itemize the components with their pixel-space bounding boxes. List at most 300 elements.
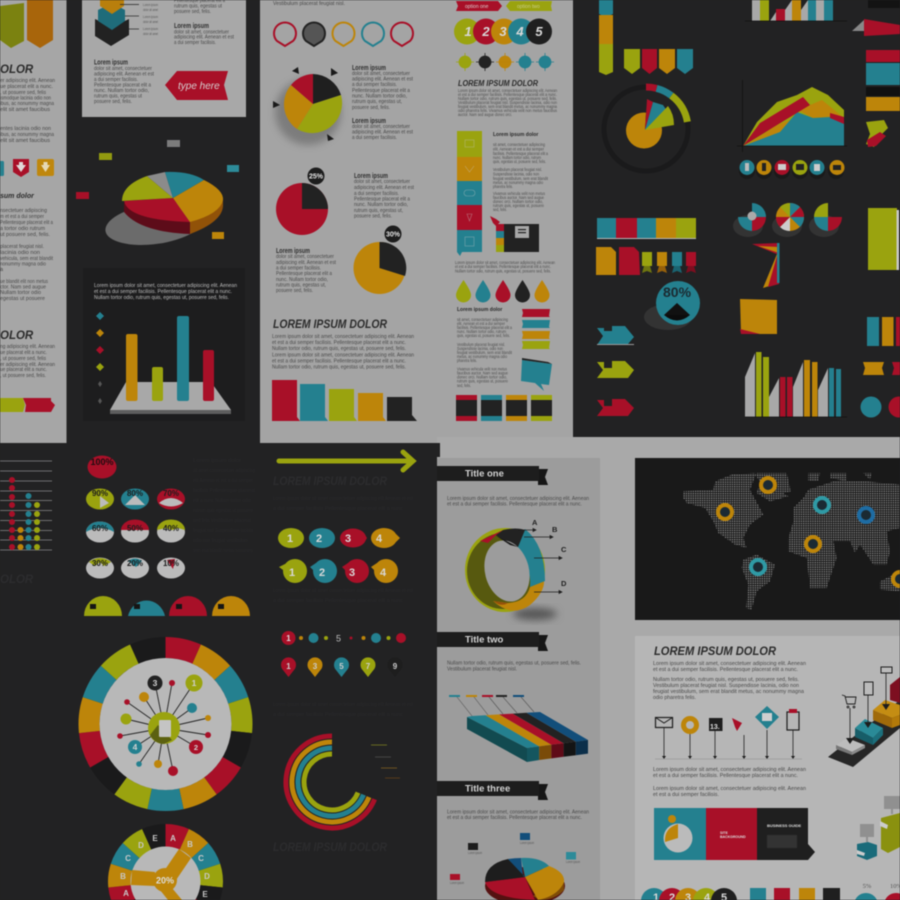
text block: lower notes: faucibus auctor. Nam sed augue: [457, 370, 508, 376]
text block: 30% note: Pellentesque placerat elit a: [276, 271, 333, 277]
chart: percent domes grid: 80%: [127, 489, 143, 498]
chart: 3D pie lower: Lorem ipsum: [468, 850, 482, 855]
text block: lower notes: feugiat vestibulum, sem erat blandit: [457, 350, 513, 355]
numbered circles: 1: [464, 24, 472, 39]
chart: lettered wheel: B: [120, 872, 126, 881]
text block: 30% note: nunc. Nullam tortor odio,: [276, 277, 328, 283]
3D column blocks: [0, 0, 53, 48]
bars: [126, 316, 214, 401]
vertical tab strip: [457, 131, 482, 256]
text block: chart note: Lorem ipsum dolor sit amet, consectetuer adipiscing elit. Aenean: [94, 283, 237, 289]
speech bubble: [521, 358, 552, 391]
faded text block: Lorem ipsum dolor sit amet consectetuer adipiscing elit Aenean et est: [273, 702, 414, 708]
text block: left intro: elit sit amet faucibus: [0, 107, 50, 113]
wheel hub and spokes: 3: [153, 678, 158, 688]
speech bubbles row one: 1: [287, 533, 293, 545]
bottom flags: [750, 888, 840, 900]
text block: card left: Pellentesque placerat elit a: [94, 82, 152, 88]
panel: upper right dark sheet: [580, 0, 900, 437]
crosshair dots: [456, 53, 554, 71]
legend diamonds: [96, 312, 104, 404]
text block: left intro: elit sit amet faucibus: [0, 138, 50, 144]
banner: title two: [437, 632, 548, 651]
panel: lower right paper: [635, 636, 900, 900]
text block: 25% note: dolor sit amet, consectetuer: [354, 179, 410, 185]
text block: left body: [0, 208, 54, 302]
faded text column: sit amet consectetuer adipiscing: [193, 468, 255, 474]
chart: 3D ring: [465, 518, 567, 620]
numbered pins row: [281, 657, 403, 677]
faded text column: elit a nunc Nullam tortor odio: [193, 498, 251, 504]
text block: lower right intro: et est a dui semper facilisis. Pellentesque placerat elit a nunc.: [653, 667, 798, 673]
banner: title three: Title three: [465, 784, 510, 794]
text block: left body: nsectetuer adipiscing: [0, 208, 47, 214]
text block: lower notes: donec orci. Nullam tortor odio,: [457, 374, 507, 380]
panel: titled sheet: [437, 458, 600, 900]
numbered dots row: 5: [336, 634, 341, 644]
ribbons: option one and two: [456, 1, 552, 11]
speech bubbles row one: 2: [316, 533, 322, 545]
subheading: lorem ipsum dolor right: LOREM IPSUM DOLOR: [458, 79, 538, 88]
icons: arrow tabs: [0, 159, 54, 177]
text block: card left: rutrum quis, egestas ut: [94, 94, 142, 100]
chart: descending tab bars: [272, 380, 417, 421]
wheel hub and spokes: [117, 674, 211, 776]
chart: lettered wheel: C: [125, 854, 131, 863]
text block: title two copy: Vestibulum placerat feugiat nisl.: [447, 666, 517, 672]
text block: lower right intro: odio pharetra felis.: [653, 695, 696, 701]
text block: tab strip notes: facilisis. Pellentesque placerat elit a: [493, 151, 548, 156]
text block: lower notes: elit. Aenean et est a dui semper: [457, 321, 505, 326]
text block: pie notes: rutrum quis, egestas ut,: [352, 99, 402, 105]
text block: card left: posuere sed, felis.: [94, 99, 132, 105]
faded text block: Lorem ipsum dolor sit amet consectetuer adipiscing elit Aenean et est: [273, 496, 414, 502]
text block: left footer: ue placerat elit a nunc.: [0, 367, 47, 373]
text block: left intro: [0, 78, 55, 144]
faded text block: Lorem ipsum dolor sit amet consectetuer adipiscing elit Aenean et est: [273, 588, 414, 594]
text block: title one copy: [447, 496, 589, 508]
pinned note card: [490, 216, 539, 252]
faded heading: lorem ipsum dolor lower: LOREM IPSUM DOLOR: [273, 842, 388, 854]
text block: left intro: , ut posuere sed, felis: [0, 90, 46, 96]
text block: card left: a dui semper facilisis.: [94, 77, 138, 83]
text block: chart note: [94, 283, 237, 301]
chart: percent domes grid: 30%: [92, 559, 108, 568]
text block: main copy: Nullam tortor odio, rutrum quis, egestas ut, posuere sed, felis.: [272, 364, 406, 370]
chart: 30% pie: [354, 226, 406, 294]
text block: title two copy: Nullam tortor odio, rutrum quis, egestas ut, posuere sed, felis.: [447, 660, 581, 666]
chart: percent domes grid: 20%: [127, 559, 143, 568]
numbered circles: 3: [499, 24, 507, 39]
text block: left footer: ue placerat elit a nunc.: [0, 350, 47, 356]
numbered pins row: 5: [339, 662, 344, 671]
text block: main copy: et est a dui semper facilisis. Pellentesque placerat elit a nunc.: [272, 358, 406, 364]
percent minis: [854, 883, 900, 900]
text block: main copy: Lorem ipsum dolor sit amet, consectetuer adipiscing elit. Aenean: [272, 334, 414, 340]
faded text column: sed felis Vestibulum placerat: [193, 518, 252, 524]
text block: left footer: er adipiscing elit. Aenean: [0, 362, 55, 368]
text block: card right: posuere sed, felis.: [174, 9, 211, 15]
text block: lower right intro: Nullam tortor odio, rutrum quis, egestas ut, posuere sed, felis.: [653, 677, 799, 683]
callout: 80 percent: [644, 281, 700, 330]
chart: 25% pie: 25%: [309, 174, 324, 180]
dark sheet top edge: [260, 443, 440, 457]
bottom numbered circles: [641, 888, 737, 900]
text block: right copy: auctor. Nam sed augue donec orci.: [458, 112, 512, 117]
speech bubbles row one: 4: [376, 533, 383, 545]
text block: 25% note: [354, 171, 414, 220]
text block: 25% note: posuere sed, felis.: [354, 214, 392, 220]
text block: title three copy: [447, 810, 589, 821]
banner: title two: Title two: [465, 634, 504, 646]
numbered pins row: 7: [366, 662, 371, 671]
icon: stacked cubes: dolor sit amet: [143, 19, 159, 24]
speech bubbles row one: 3: [345, 533, 351, 545]
fan of folded strips: [752, 243, 780, 288]
chart: radial pie: [604, 87, 688, 171]
chart: 30% pie: 30%: [386, 232, 401, 238]
text block: pie notes: Pellentesque placerat elit a: [352, 88, 411, 94]
panel: left paper column: [0, 0, 66, 443]
faded text column: feugiat nisl Suspendisse lacinia: [193, 528, 253, 534]
text block: left body: Pellentesque placerat elit a: [0, 220, 54, 226]
chart: 3D ring: D: [561, 579, 567, 588]
faded text column: facilisis Pellentesque placerat: [193, 488, 256, 494]
text block: left body: vehicula, sem erat blandit: [0, 256, 53, 262]
text block: title three copy: Lorem ipsum dolor sit amet, consectetuer adipiscing elit. Aenean: [447, 810, 589, 816]
text block: pie notes: nunc. Nullam tortor odio,: [352, 94, 407, 100]
text block: tab strip notes: Suspendisse lacinia, odio non: [493, 172, 539, 176]
text block: card left: Lorem ipsum: [94, 58, 128, 66]
folded info card: BACKGROUND: [720, 835, 746, 839]
numbered pins row: 3: [313, 662, 318, 671]
text block: pie notes: dolor sit amet, consectetuer: [352, 71, 410, 77]
chart: 100 percent dome: 100%: [90, 457, 114, 467]
faded text block: a dui semper facilisis Pellentesque placerat elit a nunc: [273, 712, 404, 718]
text block: card right: a dui semper facilisis.: [174, 40, 216, 46]
text block: left intro: entes lacinia odio non: [0, 126, 51, 132]
faded text block: a dui semper facilisis Pellentesque placerat elit a nunc: [273, 506, 404, 512]
chevron flags: [624, 49, 693, 74]
text block: lower notes: quis, egestas ut, posuere sed, felis.: [457, 333, 510, 338]
text block: lower notes: Vivamus vehicula velit non metus: [457, 366, 507, 372]
text: top stub: Vestibulum placerat feugiat nisl.: [273, 1, 345, 7]
text block: pie notes: posuere sed, felis.: [352, 105, 390, 111]
text block: lower notes: metus, ac nonummy magna odio: [457, 354, 507, 359]
text block: tab strip notes: [493, 132, 549, 212]
text block: pie notes: Lorem ipsum: [352, 63, 386, 72]
ribbon: type here: [165, 71, 228, 100]
folded info card: BUSINESS GUIDE: [767, 823, 802, 828]
faded text column: [193, 458, 256, 554]
text block: left footer: ng adipiscing elit. Aenean: [0, 344, 55, 350]
icons: pointer row: 13.: [710, 724, 720, 731]
faded heading: olor: OLOR: [0, 574, 34, 586]
tabbed icon squares: [456, 395, 552, 421]
subheading: sum dolor: sum dolor: [0, 193, 35, 200]
chart: 3D ring: C: [561, 545, 567, 554]
text block: right copy: feugiat vestibulum, sem erat blandit metus, ac nonummy magna: [458, 104, 557, 109]
text block: 25% note: adipiscing elit. Aenean et est: [354, 185, 414, 191]
text block: 25% note: Pellentesque placerat elit a: [354, 196, 411, 202]
text block: under card: [455, 260, 555, 274]
text block: lower notes: nunc. Nullam tortor odio, rutrum: [457, 329, 506, 334]
speech bubbles row two: 3: [349, 567, 355, 579]
text block: tab strip notes: donec orci. Nullam tortor odio,: [493, 199, 543, 204]
ribbons: option one and two: option one: [465, 4, 489, 10]
cube charts: [857, 796, 900, 860]
text block: lower notes: Vestibulum placerat feugiat nisl.: [457, 342, 505, 347]
sticky note: [740, 299, 777, 334]
faded text column: rutrum quis egestas ut posuere: [193, 508, 253, 514]
text block: left body: ut posuere sed, felis.: [0, 232, 50, 238]
heading: olor second: OLOR: [0, 330, 34, 342]
text block: left body: nonummy magna odio: [0, 262, 46, 268]
icons: map pins: [274, 22, 413, 46]
text block: 25% note: nunc. Nullam tortor odio,: [354, 202, 408, 208]
progress arrow bar: [0, 398, 55, 412]
text block: left body: lacinia odio non: [0, 250, 40, 256]
numbered circles: 4: [515, 24, 524, 39]
banner: title one: Title one: [465, 468, 504, 480]
chart: 3D pie lower: [450, 833, 580, 900]
chart: percent domes grid: 70%: [163, 489, 179, 498]
text block: lower notes: sed, felis.: [457, 383, 471, 388]
chart: segmented wheel: [57, 616, 274, 832]
half dome tabs: [84, 596, 250, 616]
numbered dots row: 1: [286, 634, 291, 643]
arrow tags: [597, 322, 634, 416]
text block: pie notes: dolor sit amet, consectetuer: [352, 124, 410, 130]
text block: right copy: Lorem ipsum dolor sit amet, consectetuer adipiscing elit. Aenean: [458, 88, 557, 93]
ribbon bar: [597, 218, 696, 239]
icons: pointer row: [655, 706, 802, 759]
faded text block: a dui semper facilisis Pellentesque placerat elit a nunc: [273, 598, 404, 604]
chart: 3D stripes: [449, 696, 588, 762]
faded text block: [273, 496, 414, 718]
speech bubbles row two: 2: [319, 567, 325, 579]
text block: chart note: Nullam tortor odio, rutrum quis, egestas ut, posuere sed, felis.: [94, 295, 229, 301]
text block: pie notes: adipiscing elit. Aenean et est: [352, 76, 413, 82]
panel: lower right background: [437, 437, 900, 900]
text block: pie notes: a dui semper facilisis.: [352, 82, 397, 88]
text block: 25% note: rutrum quis, egestas ut,: [354, 208, 403, 214]
chart: lettered wheel: A: [123, 889, 129, 898]
pie tags: [76, 140, 239, 239]
text block: card right: Lorem ipsum: [174, 21, 209, 30]
speech bubbles row two: 1: [289, 567, 295, 579]
chart: percent domes grid: 50%: [127, 524, 143, 533]
text block: 25% note: Lorem ipsum: [354, 171, 388, 180]
folded info card: SITE: [720, 831, 728, 835]
text block: card right: [174, 0, 234, 46]
speech bubbles row one: [278, 528, 400, 548]
text block: left intro: ibus, ac nonummy magna: [0, 132, 55, 138]
text block: left footer: , ut posuere sed, felis.: [0, 373, 46, 379]
text block: tab strip notes: sed, felis.: [493, 207, 507, 212]
icons: drops: [456, 280, 550, 303]
chart: lettered wheel: D: [204, 872, 210, 881]
chart: percent domes grid: [86, 488, 185, 578]
banner: title one: [437, 466, 548, 485]
text block: main copy: et est a dui semper facilisis. Pellentesque placerat elit a nunc.: [272, 340, 406, 346]
text block: title one copy: Lorem ipsum dolor sit amet, consectetuer adipiscing elit. Aenean: [447, 496, 589, 502]
pie slices: [122, 172, 223, 222]
text block: tab strip notes: quis, egestas ut, posuere sed, felis.: [493, 159, 546, 164]
small banner ribbons: [522, 309, 550, 349]
wheel hub and spokes: 4: [133, 742, 138, 752]
right edge shapes: [852, 0, 900, 418]
ribbon: type here: type here: [178, 81, 220, 92]
chart: pie with pointers: [273, 67, 342, 145]
text block: main copy: Lorem ipsum dolor sit amet, consectetuer adipiscing elit. Aenean: [272, 352, 414, 358]
text block: lower notes: [457, 307, 513, 388]
chart: 3D ring: B: [552, 525, 558, 534]
chart: 3D pie lower: Lorem ipsum: [450, 880, 464, 885]
text block: tab strip notes: rutrum quis, egestas ut, posuere: [493, 203, 544, 208]
text block: right copy: odio pharetra felis. Vivamus vehicula velit non metus faucibus: [458, 108, 557, 113]
heading: olor: OLOR: [0, 64, 34, 76]
text block: right copy: [458, 88, 558, 117]
text block: tab strip notes: faucibus auctor. Nam sed augue: [493, 195, 544, 200]
numbered pins row: 9: [393, 662, 398, 671]
text block: left intro: ue placerat elit a nunc.: [0, 84, 53, 90]
text block: 30% note: adipiscing elit. Aenean et est: [276, 260, 336, 266]
numbered pins row: 1: [286, 662, 291, 671]
map dots: [683, 473, 900, 610]
pie trio: [733, 203, 842, 237]
vertical ribbon: [599, 0, 613, 75]
text block: 30% note: dolor sit amet, consectetuer: [276, 254, 334, 260]
text block: under card: Nullam tortor odio, rutrum quis, egestas ut, posuere sed, felis.: [455, 268, 551, 274]
text block: lower notes: Suspendisse lacinia, odio non: [457, 346, 503, 351]
chart: percent domes grid: 40%: [163, 524, 179, 533]
text block: card left: adipiscing elit. Aenean et est: [94, 72, 154, 78]
icon: stacked cubes: Lorem ipsum: [143, 14, 158, 19]
text block: under card: et est a dui semper facilisis. Pellentesque placerat elit a nunc.: [455, 264, 551, 269]
text block: left intro: ibus, ac nonummy magna: [0, 101, 55, 107]
text block: lower notes: rutrum quis, egestas ut, posuere: [457, 378, 509, 384]
text block: card right: rutrum quis, egestas ut: [174, 4, 222, 10]
faded text column: elit Aenean et est a dui semper: [193, 478, 253, 484]
text block: left footer: [0, 344, 55, 379]
chart: lettered wheel: 20%: [156, 876, 174, 886]
text block: tab strip notes: metus, ac nonummy magna odio: [493, 180, 543, 185]
text block: left body: a tortor odio rutrum: [0, 226, 45, 232]
faded text column: sem erat blandit metus nonummy: [193, 548, 253, 554]
panel: dotted world map: [635, 458, 900, 620]
text block: right copy: Vestibulum placerat feugiat nisl. Suspendisse lacinia, odio non: [458, 100, 558, 105]
text block: tab strip notes: Vivamus vehicula velit non metus: [493, 191, 546, 196]
text block: right copy: Nullam tortor odio, rutrum quis, egestas ut, posuere sed, felis.: [458, 96, 557, 101]
chart: rainbow rings: [286, 736, 375, 828]
chart: lettered wheel: C: [198, 854, 204, 863]
text block: lower notes: Lorem ipsum dolor: [457, 307, 502, 313]
heading: lorem ipsum dolor: LOREM IPSUM DOLOR: [273, 319, 388, 331]
chart: percent domes grid: 90%: [92, 489, 108, 498]
text block: tab strip notes: Vestibulum placerat feugiat nisl.: [493, 167, 542, 172]
chart: partial bars top: [745, 0, 847, 21]
text block: card left: dolor sit amet, consectetuer: [94, 66, 152, 72]
chart: folded bars: [745, 352, 847, 417]
chart: lettered wheel: E: [202, 890, 208, 899]
text block: chart note: et est a dui semper facilisis. Pellentesque placerat elit a nunc.: [94, 289, 232, 295]
text block: left body: egestas ut posuere: [0, 296, 45, 302]
text block: lower right intro: Vestibulum placerat feugiat nisl. Suspendisse lacinia, odio non: [653, 683, 799, 689]
text block: title three copy: et est a dui semper facilisis. Pellentesque placerat elit a nunc.: [447, 815, 582, 821]
text block: lower right middle: et est a dui semper facilisis. Pellentesque placerat elit a nunc.: [653, 773, 798, 779]
text block: right copy: et est a dui semper facilisis. Pellentesque placerat elit a nunc.: [458, 92, 557, 97]
text block: tab strip notes: feugiat vestibulum, sem erat blandit: [493, 176, 549, 181]
text block: lower right middle: [653, 767, 806, 798]
pie shadow: [103, 197, 207, 251]
pie side wall: [124, 203, 190, 234]
chart: area mountain: [737, 80, 847, 152]
text block: left body: m et est a dui semper: [0, 214, 44, 220]
icon: stacked cubes: [95, 0, 159, 46]
percent minis: 5%: [863, 883, 872, 890]
text block: tab strip notes: pharetra felis.: [493, 184, 513, 189]
faded heading: lorem ipsum dolor: LOREM IPSUM DOLOR: [273, 476, 388, 488]
text block: card right: dolor sit amet, consectetuer: [174, 30, 229, 36]
arrow: long green: [279, 452, 413, 470]
text block: left body: Nullam tortor odio: [0, 290, 41, 296]
chart: lettered wheel: [101, 817, 230, 900]
numbered circles: 2: [481, 24, 490, 39]
text block: left intro: er adipiscing elit. Aenean: [0, 78, 55, 84]
chart: 100 percent dome: [88, 456, 116, 478]
speech bubbles row two: [279, 559, 398, 583]
text block: tab strip notes: elit. Aenean et est a dui semper: [493, 146, 544, 152]
text block: lower right intro: Lorem ipsum dolor sit amet, consectetuer adipiscing elit. Aenean: [653, 661, 806, 667]
text block: lower notes: sit amet, consectetuer adipiscing: [457, 317, 508, 322]
speech bubbles row two: 4: [380, 567, 387, 579]
device icon row: [739, 160, 844, 179]
text block: 30% note: rutrum quis, egestas ut,: [276, 282, 326, 288]
text block: left footer: , ut posuere sed, felis: [0, 356, 46, 362]
callout: 80 percent: 80%: [663, 284, 692, 300]
text block: 30% note: posuere sed, felis.: [276, 288, 313, 294]
chart: percent domes grid: 10%: [163, 559, 179, 568]
chart: 3D pie lower: Lorem ipsum: [566, 859, 580, 864]
text block: lower notes: facilisis. Pellentesque placerat elit a: [457, 325, 512, 330]
text block: pie notes: Lorem ipsum: [352, 116, 386, 125]
text block: title one copy: et est a dui semper facilisis. Pellentesque placerat elit a nunc.: [447, 502, 582, 508]
text block: card left: [94, 58, 154, 105]
ring legend dashes: [371, 745, 400, 778]
folded info card: [654, 808, 815, 860]
chart: lettered wheel: B: [187, 840, 193, 849]
text block: under card: Lorem ipsum dolor sit amet, consectetuer adipiscing elit. Aenean: [455, 260, 555, 265]
text block: card left: nunc. Nullam tortor odio,: [94, 88, 149, 94]
text block: lower right middle: Lorem ipsum dolor sit amet, consectetuer adipiscing elit. Aenean: [653, 786, 806, 792]
text block: lower right middle: et est a dui semper facilisis.: [653, 792, 719, 798]
banner: title three: [437, 781, 548, 800]
text block: tab strip notes: nunc. Nullam tortor odio, rutrum: [493, 155, 541, 160]
text block: pie notes: a dui semper facilisis.: [352, 135, 397, 141]
text block: tab strip notes: sit amet, consectetuer adipiscing: [493, 142, 545, 147]
text block: card right: adipiscing elit. Aenean et est: [174, 34, 234, 40]
chart: lettered wheel: D: [138, 841, 144, 850]
heading: lorem ipsum dolor lower: LOREM IPSUM DOLOR: [654, 644, 776, 658]
map markers: [718, 478, 900, 586]
panel: upper paper card: [82, 0, 246, 117]
text block: lower notes: pharetra felis.: [457, 358, 477, 363]
text block: lower right intro: feugiat vestibulum, sem erat blandit metus, ac nonummy magna: [653, 689, 805, 695]
panel: dark bar chart: [83, 268, 245, 421]
faded text column: Lorem ipsum dolor: [193, 458, 241, 464]
text block: title two copy: [447, 660, 581, 672]
